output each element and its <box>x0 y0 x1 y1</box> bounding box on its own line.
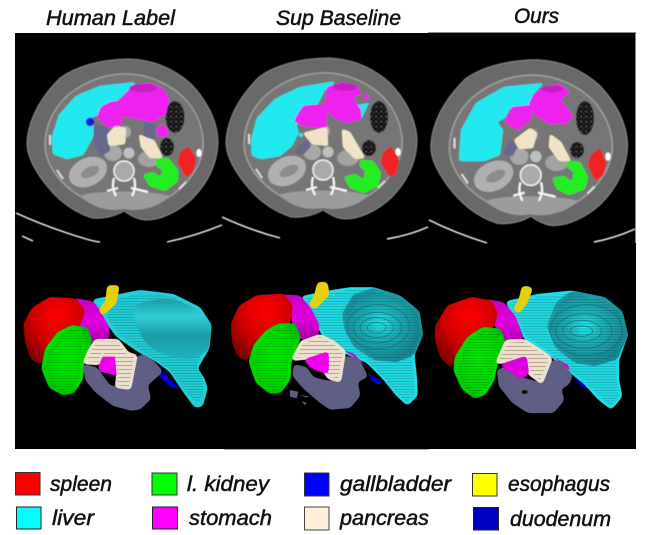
legend label: liver: liver <box>52 507 95 530</box>
legend swatch: stomach <box>152 507 178 529</box>
duodenum <box>83 354 163 410</box>
liver contours <box>347 305 410 349</box>
liver <box>301 288 423 405</box>
spleen <box>178 146 196 177</box>
gallbladder <box>86 118 94 126</box>
legend label: esophagus: esophagus <box>508 473 610 496</box>
debris fragments <box>290 390 309 405</box>
pancreas <box>514 128 571 161</box>
legend label: stomach: stomach <box>189 507 272 530</box>
liver contours <box>550 305 622 355</box>
legend swatch: pancreas <box>304 507 329 530</box>
panel: 3D render human label <box>24 286 211 410</box>
gallbladder <box>158 372 180 389</box>
stomach <box>529 84 573 124</box>
stomach <box>97 83 169 127</box>
title: Sup Baseline: Sup Baseline <box>276 7 401 30</box>
liver front lobe <box>343 288 423 362</box>
left kidney <box>143 158 178 191</box>
stomach <box>481 299 524 342</box>
duodenum <box>296 139 311 154</box>
liver front lobe <box>547 292 628 366</box>
stomach fragment <box>303 352 328 374</box>
legend label: spleen: spleen <box>50 473 112 496</box>
title: Ours: Ours <box>514 5 559 28</box>
duodenum <box>497 361 572 413</box>
esophagus <box>99 286 119 316</box>
left kidney <box>454 327 505 398</box>
spleen <box>435 297 497 368</box>
stomach <box>72 298 109 342</box>
panel: CT slice human label <box>16 59 222 242</box>
legend label: l. kidney: l. kidney <box>187 473 271 496</box>
panel: CT slice sup baseline <box>222 58 428 239</box>
legend swatch: l. kidney <box>152 473 177 495</box>
esophagus <box>309 282 329 309</box>
liver <box>52 82 137 159</box>
legend swatch: gallbladder <box>304 473 329 496</box>
pancreas <box>107 126 163 158</box>
pancreas <box>303 127 365 159</box>
panel: CT slice ours <box>429 60 635 243</box>
bottom edge <box>224 449 429 450</box>
legend swatch: liver <box>16 507 41 529</box>
legend swatch: duodenum <box>474 508 498 530</box>
spleen <box>24 297 85 364</box>
legend label: duodenum: duodenum <box>510 508 611 531</box>
duodenum <box>293 356 368 409</box>
stomach <box>294 82 361 128</box>
stomach fragment <box>98 357 117 376</box>
esophagus <box>513 286 533 314</box>
legend label: pancreas: pancreas <box>339 507 430 530</box>
spleen <box>588 148 606 180</box>
liver <box>92 290 211 407</box>
gallbladder <box>573 375 593 390</box>
spleen <box>231 294 293 361</box>
liver <box>459 83 544 161</box>
pancreas <box>83 339 137 390</box>
legend swatch: esophagus <box>472 474 497 496</box>
liver front lobe <box>133 300 211 359</box>
gallbladder <box>369 373 382 384</box>
liver <box>506 291 628 409</box>
legend swatch: spleen <box>16 472 40 495</box>
left kidney <box>42 326 92 395</box>
panel: 3D render ours <box>435 286 628 413</box>
left kidney <box>344 160 381 193</box>
title: Human Label: Human Label <box>46 7 176 30</box>
stomach fragment <box>500 356 529 379</box>
legend <box>16 472 611 531</box>
duodenum <box>503 139 517 156</box>
left kidney <box>552 161 588 195</box>
spleen <box>381 146 399 177</box>
panel edge <box>428 32 636 243</box>
pancreas <box>495 339 552 384</box>
black image background <box>15 33 636 449</box>
duodenum <box>94 121 156 156</box>
stomach <box>276 294 319 339</box>
pancreas <box>291 334 346 382</box>
left kidney <box>249 323 300 394</box>
legend label: gallbladder: gallbladder <box>340 473 452 496</box>
liver <box>251 81 337 159</box>
panel: 3D render sup baseline <box>231 282 423 409</box>
